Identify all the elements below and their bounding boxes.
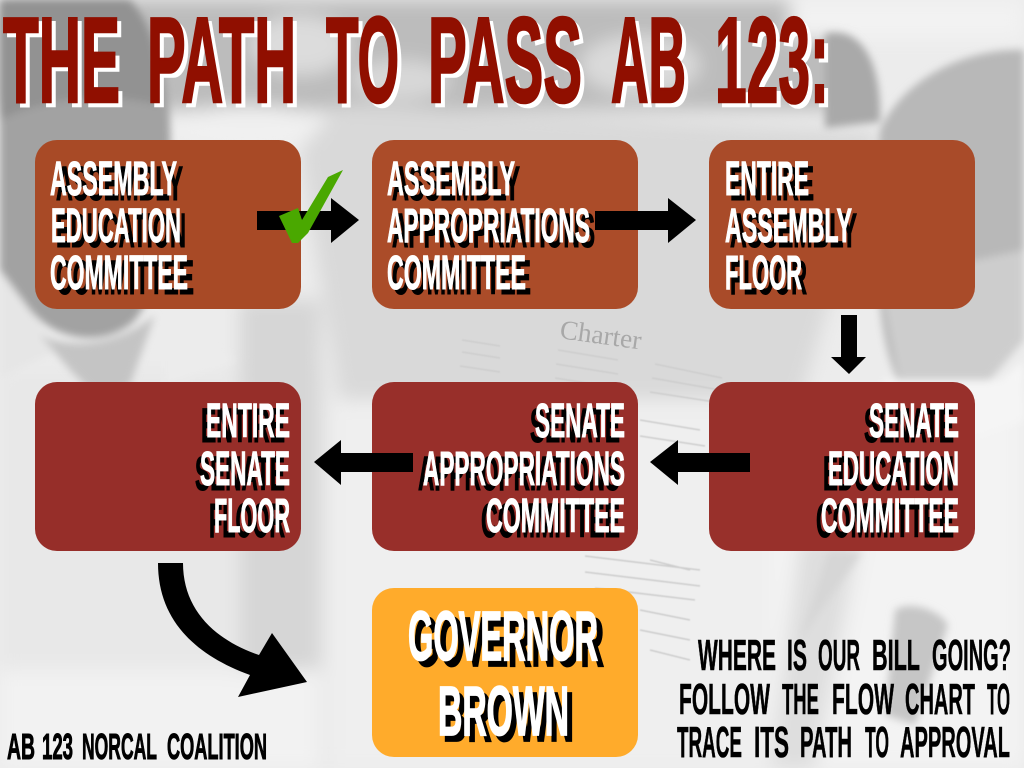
panel: Entire Senate Floor (35, 382, 301, 551)
panel: Senate Appropriations Committee: SENATE (535, 395, 625, 448)
panel: Assembly Appropriations Committee: COMMITTEE (387, 247, 526, 300)
panel: Senate Appropriations Committee: APPROPRIATIONS (423, 443, 625, 496)
credit text: 123 (42, 726, 73, 767)
panel: Entire Assembly Floor: ENTIRE (730, 158, 814, 211)
panel: Assembly Appropriations Committee: APPROPRIATIONS (392, 205, 595, 258)
explanatory text: THE (782, 675, 819, 724)
title: THE (7, 0, 124, 132)
icon: green check mark (279, 170, 343, 243)
panel: Senate Education Committee (709, 382, 975, 551)
explanatory text: BILL (872, 631, 920, 680)
arrow: senate appropriations to senate floor (314, 440, 413, 485)
panel: Assembly Education Committee (35, 140, 301, 309)
explanatory text: TRACE (677, 718, 742, 767)
panel: Governor Brown: BROWN (438, 672, 569, 750)
panel: Senate Appropriations Committee: COMMITTEE (481, 495, 620, 548)
panel: Assembly Appropriations Committee: ASSEMBLY (387, 153, 515, 206)
title: AB (615, 0, 690, 132)
panel: Entire Senate Floor: ENTIRE (206, 395, 290, 448)
panel: Entire Assembly Floor: FLOOR (725, 247, 802, 300)
explanatory text: ITS (754, 718, 789, 767)
explanatory text: FOLLOW (679, 675, 770, 724)
panel: Senate Appropriations Committee (372, 382, 638, 551)
credit text (7, 726, 267, 767)
panel: Assembly Education Committee: EDUCATION (56, 205, 186, 258)
panel: Assembly Appropriations Committee: APPROPRIATIONS (387, 200, 590, 253)
panel: Governor Brown: GOVERNOR (414, 603, 604, 681)
panel: Entire Senate Floor: ENTIRE (201, 400, 285, 453)
panel: Senate Appropriations Committee: COMMITTEE (486, 490, 625, 543)
title (3, 0, 833, 132)
credit text: NORCAL (82, 726, 157, 767)
explanatory text: TO (865, 718, 889, 767)
explanatory text: FLOW (832, 675, 894, 724)
panel: Senate Appropriations Committee: APPROPRIATIONS (418, 448, 620, 501)
arrow: curved arrow to governor (158, 563, 307, 697)
panel: Governor Brown: GOVERNOR (408, 597, 598, 675)
panel: Entire Senate Floor: SENATE (195, 448, 285, 501)
panel: Assembly Appropriations Committee: ASSEMBLY (392, 158, 520, 211)
explanatory text: WHERE (698, 631, 776, 680)
arrow: education to appropriations (257, 198, 359, 243)
explanatory text: PATH (800, 718, 852, 767)
panel: Governor Brown: BROWN (443, 678, 574, 756)
credit text: COALITION (167, 726, 267, 767)
panel: Assembly Education Committee: EDUCATION (51, 200, 181, 253)
credit text: AB (7, 726, 35, 767)
panel: Entire Assembly Floor: FLOOR (730, 252, 807, 305)
panel: Assembly Appropriations Committee (372, 140, 638, 309)
panel: Senate Appropriations Committee: SENATE (530, 400, 620, 453)
panel: Assembly Education Committee: COMMITTEE (56, 252, 194, 305)
panel: Entire Senate Floor: FLOOR (209, 495, 285, 548)
explanatory text: OUR (818, 631, 860, 680)
text: 123: (719, 0, 833, 132)
panel: Entire Assembly Floor (709, 140, 975, 309)
panel: Entire Senate Floor: FLOOR (214, 490, 290, 543)
panel: Entire Assembly Floor: ASSEMBLY (730, 205, 857, 258)
panel: Assembly Education Committee: ASSEMBLY (56, 158, 183, 211)
arrow: senate education to senate appropriations (650, 440, 750, 485)
arrow: assembly floor to senate (831, 315, 866, 374)
panel: Assembly Education Committee: ASSEMBLY (50, 153, 177, 206)
title: TO (330, 0, 403, 132)
arrow: appropriations to assembly floor (595, 198, 696, 243)
panel: Governor Brown (372, 588, 638, 757)
panel: Entire Senate Floor: SENATE (200, 443, 290, 496)
panel: Entire Assembly Floor: ASSEMBLY (725, 200, 852, 253)
explanatory text: IS (787, 631, 807, 680)
title: PATH (151, 0, 300, 132)
document text: Charter: Charter (558, 314, 644, 355)
panel: Assembly Appropriations Committee: COMMITTEE (392, 252, 531, 305)
panel: Assembly Education Committee: COMMITTEE (50, 247, 188, 300)
panel: Entire Assembly Floor: ENTIRE (725, 153, 809, 206)
title: PASS (432, 0, 586, 132)
explanatory text (677, 631, 1011, 767)
